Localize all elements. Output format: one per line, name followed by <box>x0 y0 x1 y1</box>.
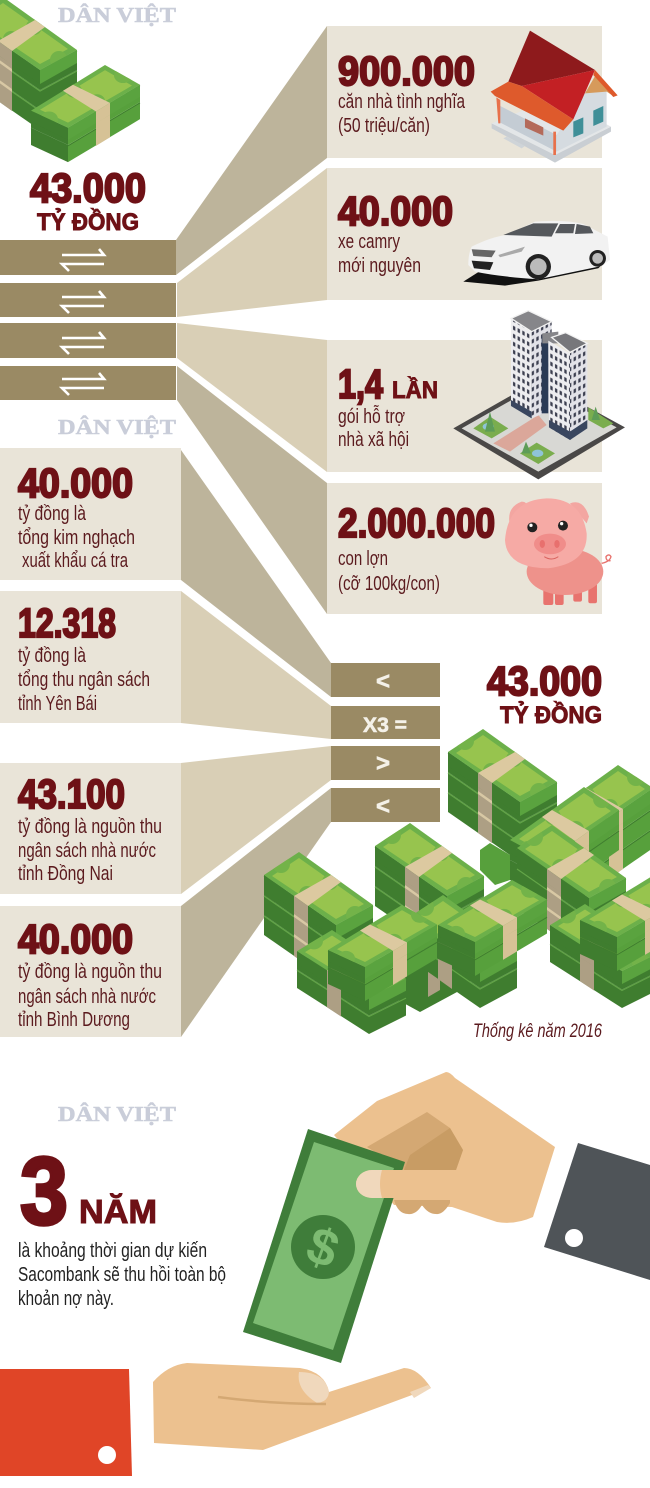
watermark: middle: DÂN VIỆT <box>58 415 176 439</box>
icon: upper sleeve <box>544 1143 650 1280</box>
heading: 3 năm: 3 <box>20 1138 68 1245</box>
panel: 1,4 lần: LẦN <box>392 376 438 404</box>
panel: 2.000.000 pigs: con lợn <box>338 548 388 570</box>
heading: 43.000 tỷ đồng top: TỶ ĐỒNG <box>37 207 139 236</box>
panel: 43.100 Đồng Nai: ngân sách nhà nước <box>18 840 156 862</box>
panel: 43.100 Đồng Nai: tỷ đồng là nguồn thu <box>18 816 162 838</box>
icon: upper hand <box>334 1072 555 1223</box>
equivalence bars <box>0 240 176 400</box>
panel: 43.100 Đồng Nai: tỉnh Đồng Nai <box>18 863 113 885</box>
panel: 2.000.000 pigs: 2.000.000 <box>338 500 495 546</box>
text block: recovery time: Sacombank sẽ thu hồi toàn bộ <box>18 1264 226 1286</box>
panel: 12.318 Yên Bái <box>0 591 181 723</box>
panel: 2.000.000 pigs <box>327 483 602 614</box>
comparison bars: < <box>376 793 390 820</box>
icon: banknote <box>243 1129 405 1363</box>
panel: 40.000 cá tra: tỷ đồng là <box>18 503 87 525</box>
panel: 900.000 houses: (50 triệu/căn) <box>338 115 430 137</box>
watermark: bottom: DÂN VIỆT <box>58 1102 176 1126</box>
icon: thumb <box>356 1170 452 1198</box>
comparison bars: X3 = <box>363 714 407 737</box>
panel: 1,4 lần: 1,4 <box>338 361 383 407</box>
text block: recovery time <box>18 1240 226 1310</box>
funnel connectors: top <box>176 26 327 614</box>
panel: 900.000 houses: căn nhà tình nghĩa <box>338 91 466 113</box>
panel: 12.318 Yên Bái: tỷ đồng là <box>18 645 87 667</box>
panel: 900.000 houses <box>327 26 602 158</box>
panel: 40.000 cá tra: 40.000 <box>18 460 133 506</box>
heading: 43.000 tỷ đồng lower: TỶ ĐỒNG <box>500 700 602 729</box>
icon: car <box>463 221 610 286</box>
icon: lower hand <box>153 1363 431 1450</box>
heading: 43.000 tỷ đồng lower: 43.000 <box>487 658 602 704</box>
icon: money stacks top <box>0 0 140 162</box>
heading: 43.000 tỷ đồng lower <box>487 658 602 729</box>
panel: 40.000 Bình Dương: tỉnh Bình Dương <box>18 1009 130 1031</box>
heading: 43.000 tỷ đồng top <box>30 165 146 236</box>
panel: 12.318 Yên Bái: tổng thu ngân sách <box>18 669 150 691</box>
watermark: top: DÂN VIỆT <box>58 3 176 27</box>
panel: 40.000 cá tra: xuất khẩu cá tra <box>22 550 129 572</box>
panel: 40.000 cá tra <box>0 448 181 580</box>
comparison bars: < <box>376 668 390 695</box>
panel: 40.000 Bình Dương: 40.000 <box>18 916 133 962</box>
panel: 43.100 Đồng Nai: 43.100 <box>18 771 125 817</box>
panel: 12.318 Yên Bái: 12.318 <box>18 600 116 646</box>
panel: 43.100 Đồng Nai <box>0 763 181 894</box>
comparison bars <box>331 663 440 822</box>
text block: recovery time: khoản nợ này. <box>18 1288 114 1310</box>
panel: 1,4 lần <box>327 340 602 472</box>
panel: 40.000 cars: xe camry <box>338 231 400 253</box>
panel: 1,4 lần: gói hỗ trợ <box>338 405 405 428</box>
panel: 12.318 Yên Bái: tỉnh Yên Bái <box>18 693 97 715</box>
funnel connectors: lower <box>181 450 331 1037</box>
icon: banknote: $ <box>299 1216 346 1280</box>
heading: 3 năm <box>20 1138 157 1245</box>
panel: 40.000 cars: mới nguyên <box>338 255 421 277</box>
comparison bars: > <box>376 750 390 777</box>
panel: 1,4 lần: nhà xã hội <box>338 429 409 451</box>
panel: 40.000 Bình Dương <box>0 906 181 1037</box>
icon: apartment towers <box>453 311 625 479</box>
heading: 3 năm: NĂM <box>79 1193 157 1230</box>
panel: 900.000 houses: 900.000 <box>338 48 475 94</box>
heading: 43.000 tỷ đồng top: 43.000 <box>30 165 146 211</box>
icon: lower sleeve <box>0 1369 132 1476</box>
icon: money pile <box>264 729 650 1034</box>
panel: 40.000 Bình Dương: ngân sách nhà nước <box>18 986 156 1008</box>
panel: 40.000 Bình Dương: tỷ đồng là nguồn thu <box>18 961 162 983</box>
icon: pig <box>505 498 611 605</box>
panel: 40.000 cá tra: tổng kim nghạch <box>18 527 135 549</box>
icon: house <box>491 31 618 163</box>
caption: Thống kê năm 2016: Thống kê năm 2016 <box>473 1021 602 1042</box>
panel: 40.000 cars: 40.000 <box>338 188 453 234</box>
panel: 40.000 cars <box>327 168 602 300</box>
panel: 2.000.000 pigs: (cỡ 100kg/con) <box>338 573 440 595</box>
text block: recovery time: là khoảng thời gian dự kiến <box>18 1240 207 1262</box>
